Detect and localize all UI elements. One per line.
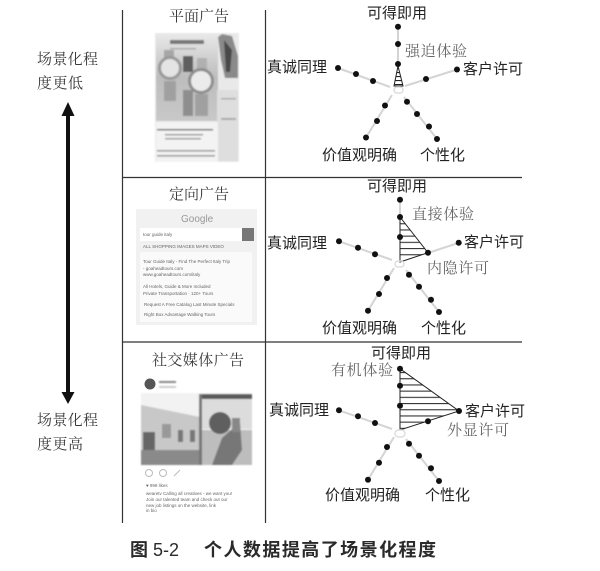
image: Google search ad screenshot: ALL SHOPPING IMAGES MAPS VIDEO: [143, 244, 224, 249]
radar chart: targeted ad: 客户许可: [464, 234, 524, 251]
image: Google search ad screenshot: Right Box Advantage Walking Tours: [144, 312, 216, 317]
figure caption: 图: [130, 540, 148, 560]
left label: lower contextualization: 度更低: [37, 74, 83, 92]
panel heading: targeted ad: 定向广告: [169, 186, 229, 203]
hatched area: [400, 217, 428, 262]
figure caption: 5-2: [153, 540, 179, 560]
image: Instagram-style social post: Join our talented team and check out our: [146, 497, 228, 502]
image: Google search ad screenshot: - goaheadtours.com: [143, 266, 183, 271]
image: Instagram-style social post: new job listings on the website, link: [146, 503, 217, 508]
left label: higher contextualization: 场景化程: [37, 412, 98, 429]
image: Instagram-style social post: ♥ 999 likes: [146, 483, 168, 488]
radar chart: social media ad: [269, 345, 525, 504]
image: Instagram-style social post: in bio: [146, 508, 157, 513]
radar chart: social media ad: 外显许可: [447, 422, 509, 439]
radar chart: print ad: 真诚同理: [267, 58, 327, 76]
radar chart: print ad: 客户许可: [463, 61, 523, 78]
radar chart: social media ad: 可得即用: [371, 345, 431, 362]
radar chart: print ad: 可得即用: [367, 5, 427, 22]
radar chart: targeted ad: 直接体验: [412, 206, 474, 223]
radar chart: targeted ad: 内隐许可: [427, 260, 489, 277]
image: Google search ad screenshot: Tour Guide Italy - Find The Perfect Italy Trip: [143, 259, 230, 264]
panel heading: print ad: 平面广告: [169, 8, 229, 25]
image: Google search ad screenshot: Google: [181, 214, 214, 225]
image: Google search ad screenshot: Request A Free Catalog Last Minute Specials: [144, 302, 235, 307]
radar chart: print ad: [267, 5, 523, 164]
image: Google search ad screenshot: www.goaheadtours.com/italy: [143, 272, 201, 277]
radar chart: print ad: 个性化: [420, 147, 465, 164]
image: Google search ad screenshot: All Hotels, Guide & More Included: [143, 284, 211, 289]
radar chart: targeted ad: 可得即用: [367, 178, 427, 195]
radar chart: social media ad: 客户许可: [465, 403, 525, 420]
radar chart: social media ad: 有机体验: [331, 362, 393, 379]
radar chart: targeted ad: 价值观明确: [322, 320, 397, 337]
panel heading: social media ad: 社交媒体广告: [152, 351, 244, 369]
hatched area: [400, 369, 459, 430]
image: Instagram-style social post: wearetv Calling all creatives - we want you!: [146, 491, 232, 496]
left label: lower contextualization: [37, 51, 98, 92]
vertical double arrow: [62, 102, 74, 404]
radar chart: social media ad: 价值观明确: [325, 487, 400, 504]
radar chart: print ad: 强迫体验: [405, 43, 467, 60]
image: Google search ad screenshot: [136, 209, 257, 325]
figure caption: 个人数据提高了场景化程度: [204, 539, 436, 560]
radar chart: targeted ad: [267, 178, 524, 337]
table grid: [122, 10, 522, 523]
image: Google search ad screenshot: tour guide italy: [143, 232, 173, 237]
radar chart: print ad: 价值观明确: [322, 147, 397, 164]
radar chart: targeted ad: 个性化: [421, 320, 466, 337]
left label: higher contextualization: 度更高: [37, 435, 83, 453]
radar chart: social media ad: 个性化: [425, 487, 470, 504]
left label: higher contextualization: [37, 412, 98, 453]
image: Instagram-style social post: [141, 378, 252, 513]
left label: lower contextualization: 场景化程: [37, 51, 98, 68]
image: Google search ad screenshot: Private Transportation · 120+ Tours: [143, 291, 214, 296]
image: print newspaper ad: [155, 33, 239, 162]
hatched area: [394, 66, 403, 86]
radar chart: social media ad: 真诚同理: [269, 401, 329, 419]
radar chart: targeted ad: 真诚同理: [267, 234, 327, 252]
